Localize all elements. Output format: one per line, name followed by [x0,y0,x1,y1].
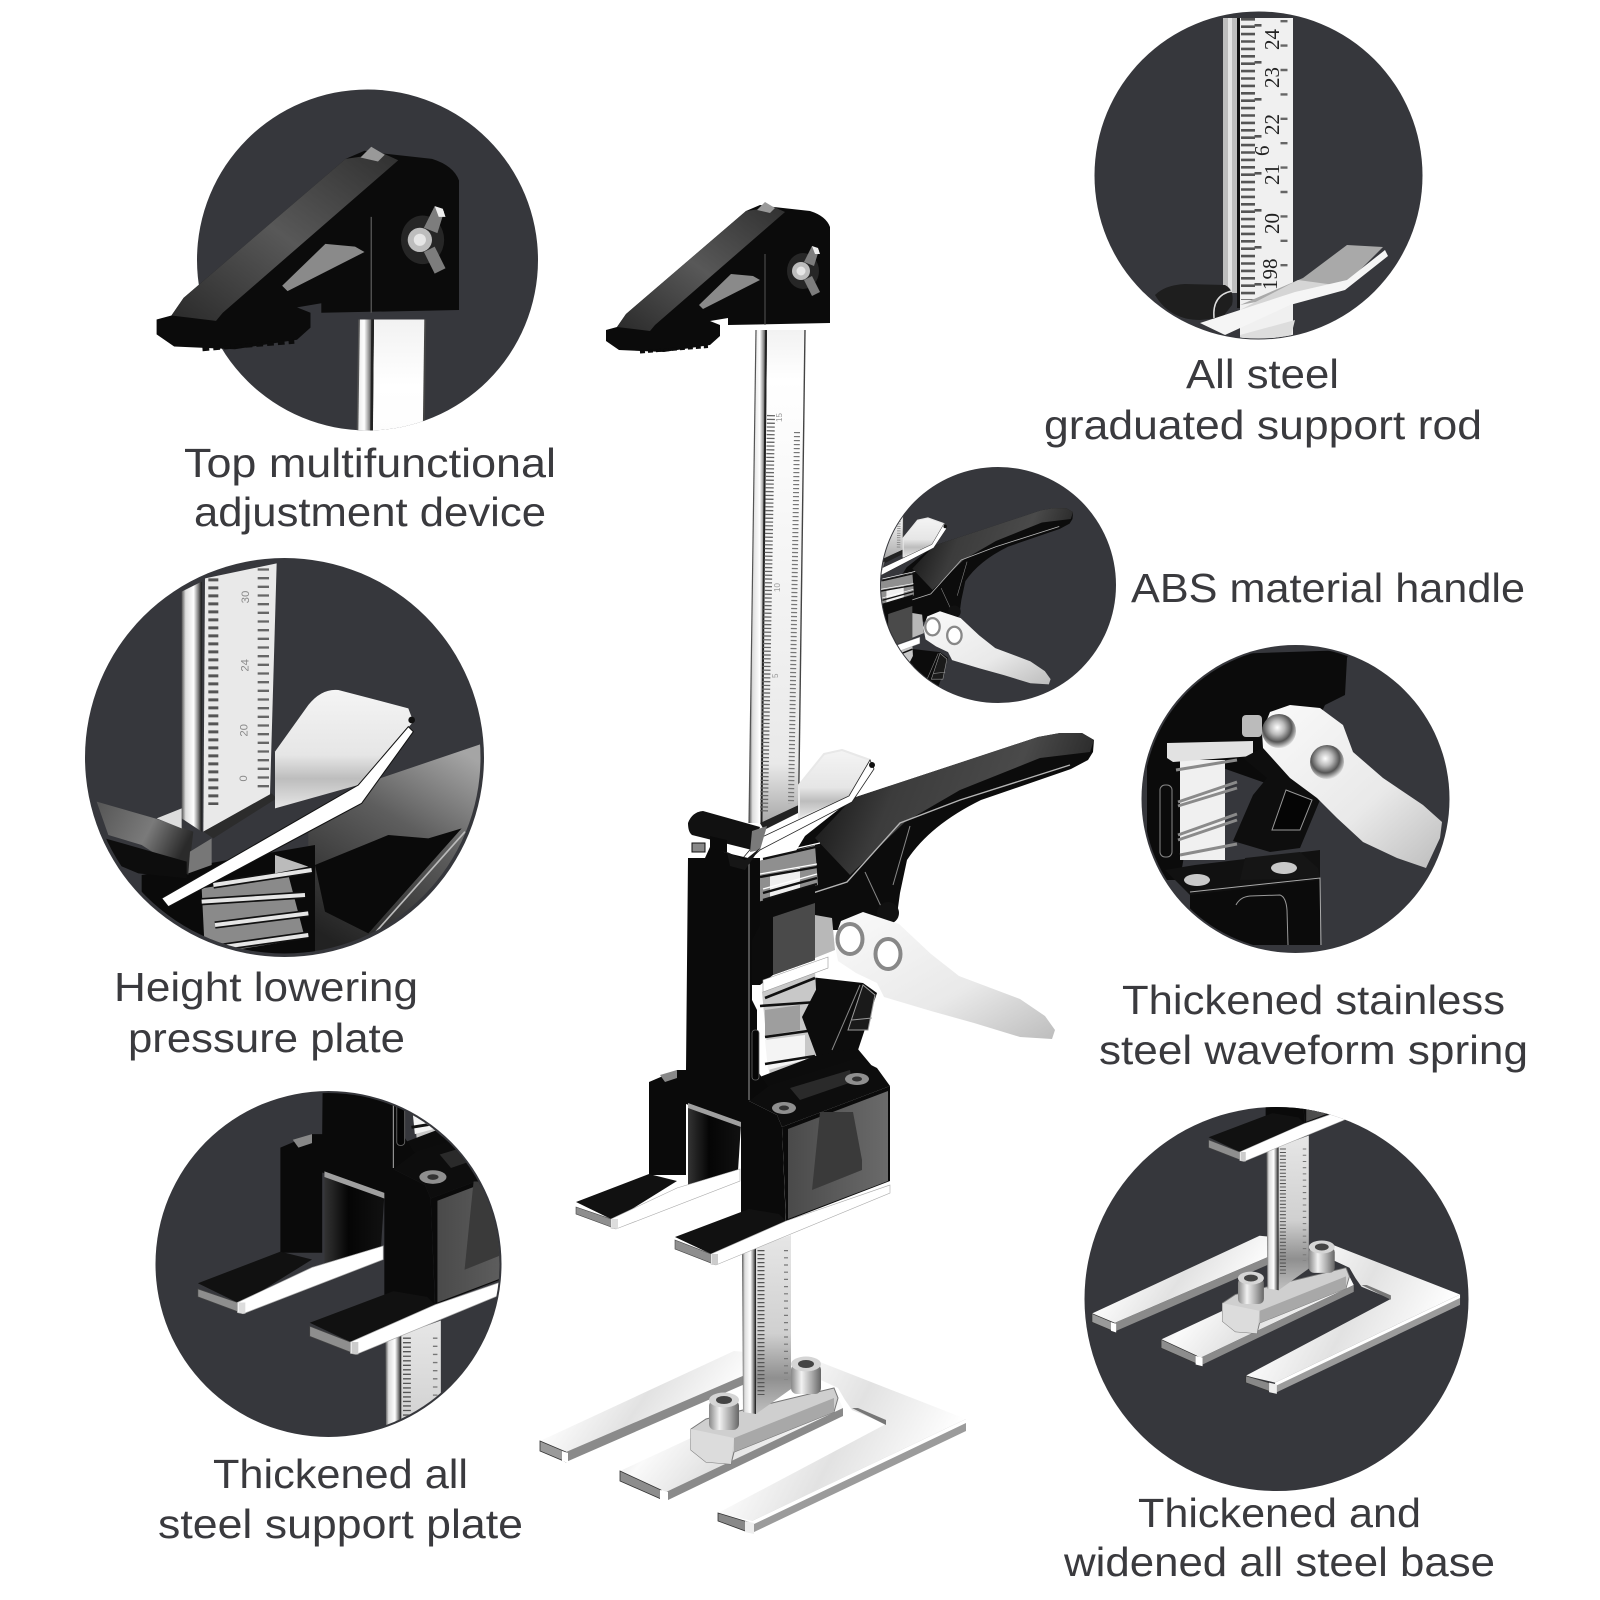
label: top device: Top multifunctional [184,440,556,486]
handle arm [760,733,1094,930]
graduated rod: 20 [239,724,251,737]
zoomed ruler: 198 [1258,258,1282,290]
wing nut [787,246,820,296]
label: ABS handle: ABS material handle [1131,565,1525,611]
zoomed ruler: 6 [1250,146,1274,156]
label: steel base: widened all steel base [1063,1539,1495,1585]
circle: pressure plate detail [85,558,484,958]
zoomed ruler: 21 [1260,164,1284,185]
graduated rod [182,563,277,838]
upper graduated rod: 5 [771,673,780,678]
zoomed ruler: 23 [1260,67,1284,88]
zoomed base view [1092,1107,1460,1394]
circle: support plate detail [156,1091,502,1437]
top adjustment head [606,202,830,352]
zoomed ruler: 22 [1260,114,1284,135]
support plate: rear foot [576,1169,740,1229]
upper graduated rod: 10 [773,583,782,592]
label: pressure plate: Height lowering [114,964,418,1010]
middle block and white bar [748,885,835,992]
circle: steel base detail [1084,1107,1468,1491]
label: top device [184,440,556,535]
silver release lever [834,912,1055,1039]
label: support rod: All steel [1186,351,1339,397]
top cap of body [688,811,767,870]
front block with screws [749,1058,890,1221]
label: waveform spring [1099,977,1528,1073]
lower graduated rod [742,1235,791,1414]
zoomed handle view [881,508,1073,686]
label: waveform spring: Thickened stainless [1122,977,1505,1023]
label: support plate: steel support plate [158,1501,523,1547]
zoomed support plate view [198,1093,500,1425]
plate [1240,245,1383,305]
upper graduated rod: 15 [775,413,784,422]
support plate: front foot [675,1185,890,1265]
circle: ABS handle detail [880,467,1116,703]
label: pressure plate: pressure plate [128,1015,405,1061]
label: support rod: graduated support rod [1044,402,1482,448]
zoomed plate view [97,563,483,958]
upper graduated rod [749,330,805,830]
circle: graduated support rod detail [1094,12,1422,345]
circle: top adjustment device detail [156,90,538,430]
black main body [649,847,786,1225]
rod collar [97,802,212,878]
pressure plate [162,690,415,907]
tool upper assembly [576,202,1094,1414]
waveform springs [755,843,872,1098]
label: support plate: Thickened all [213,1451,468,1497]
circle: waveform spring detail [1142,645,1450,953]
zoomed ruler [1155,18,1388,345]
label: support plate [158,1451,523,1547]
main product: lifting tool [540,202,1094,1534]
pressure plate [743,750,875,864]
steel base [540,1351,966,1534]
graduated rod: 0 [238,775,250,782]
label: support rod [1044,351,1482,448]
lower handle leg [802,977,877,1058]
graduated rod: 24 [239,659,251,672]
zoomed ruler: 20 [1260,213,1284,234]
label: waveform spring: steel waveform spring [1099,1027,1528,1073]
cap [1155,284,1233,320]
zoomed head view [156,146,459,430]
label: steel base: Thickened and [1138,1490,1421,1536]
zoomed ruler: 24 [1260,28,1284,50]
zoomed spring view [1147,650,1442,945]
label: steel base [1063,1490,1495,1585]
graduated rod: 30 [240,591,252,603]
label: top device: adjustment device [194,489,546,535]
label: pressure plate [114,964,418,1061]
